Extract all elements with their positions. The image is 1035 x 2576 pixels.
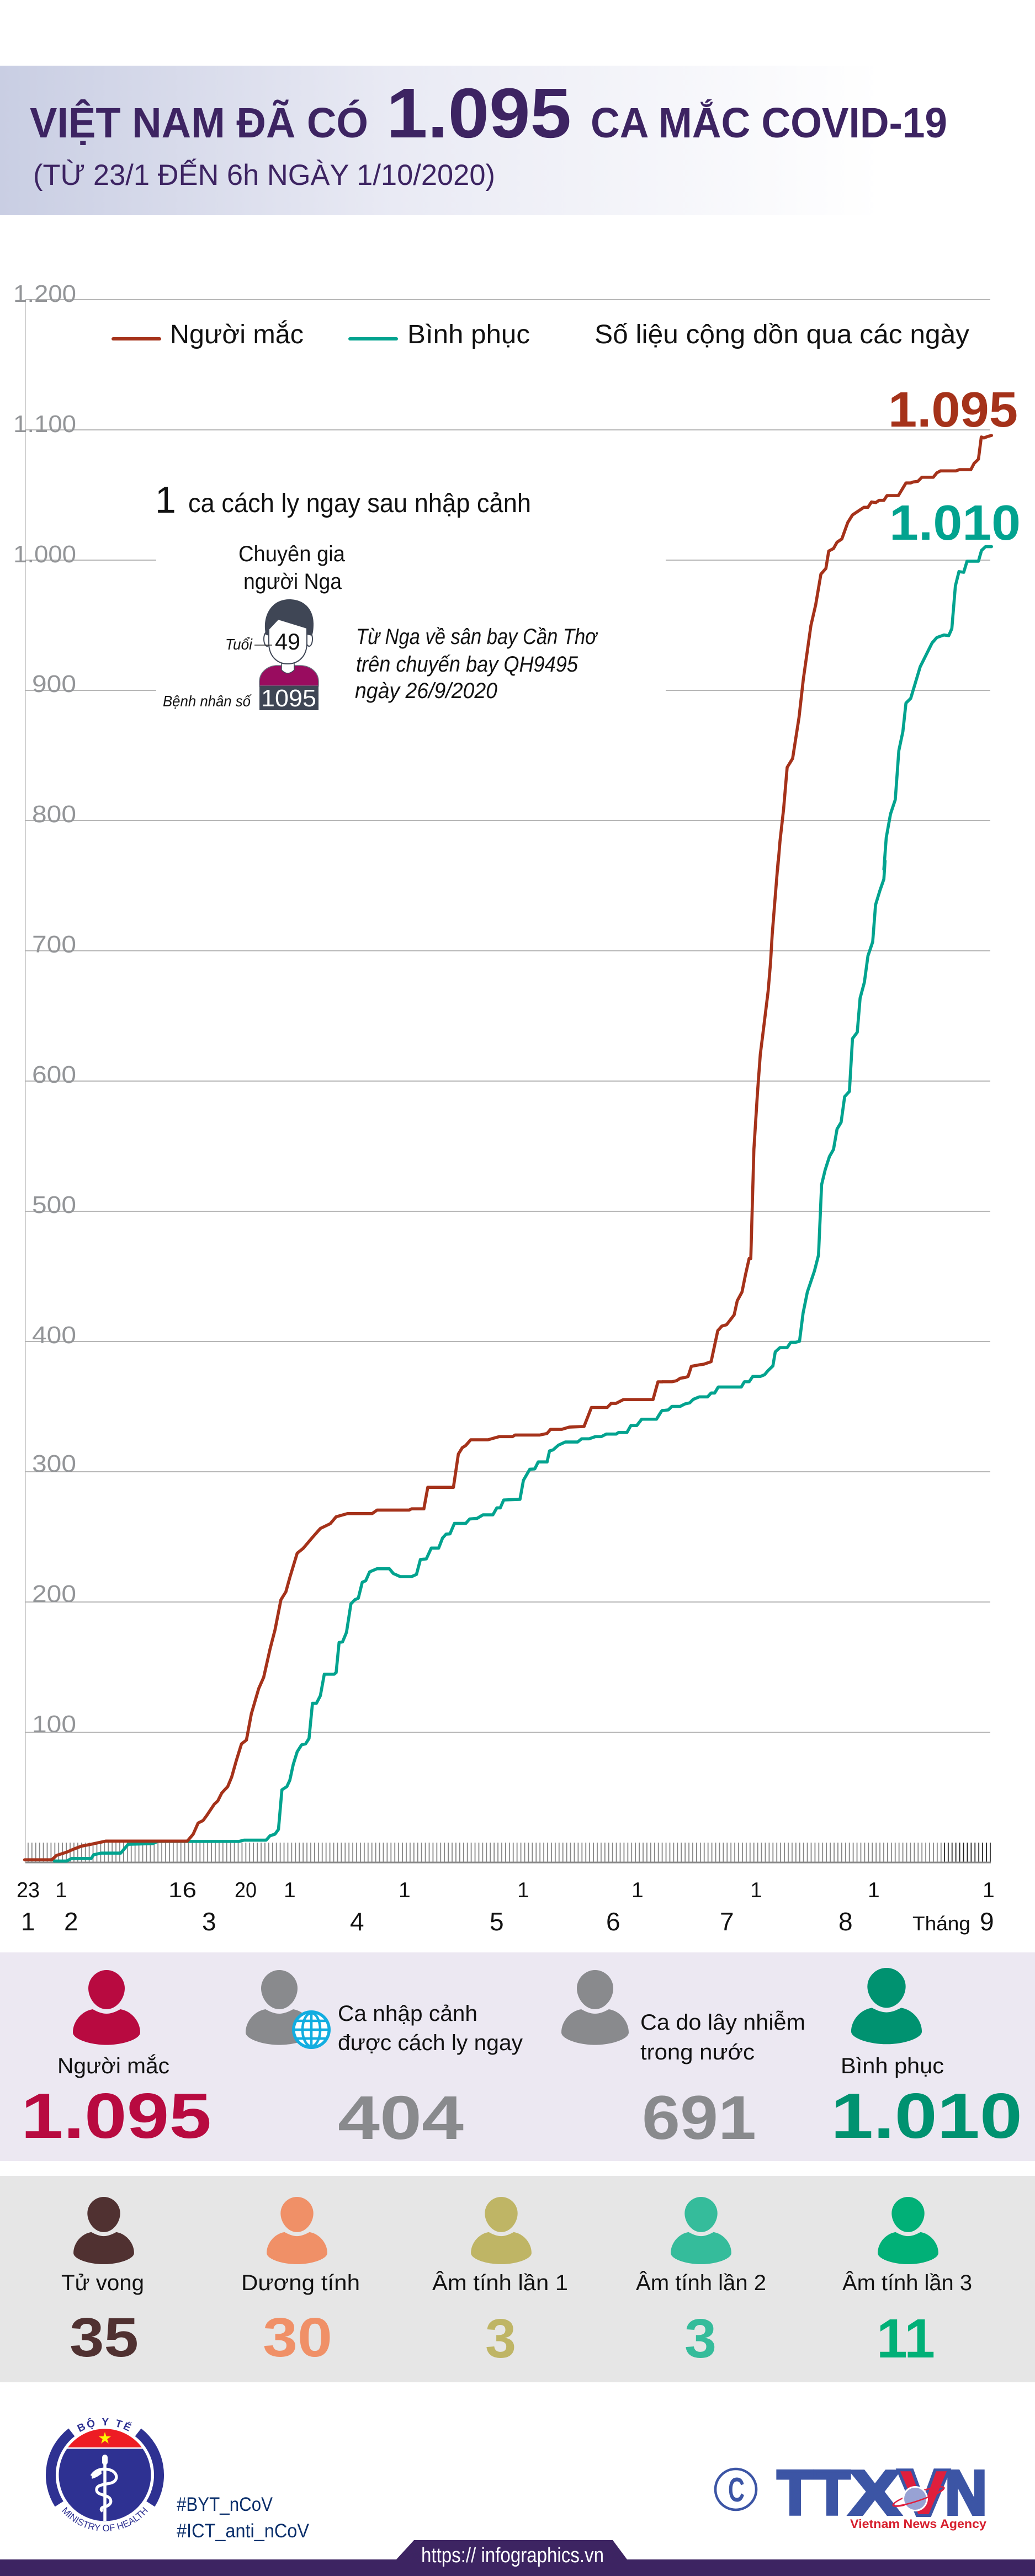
stat: positive: 30 (263, 2307, 332, 2369)
stat: domestic: Ca do lây nhiễm (640, 2010, 805, 2035)
stat: deaths: 35 (70, 2307, 139, 2369)
x axis month labels: 9 (980, 1907, 994, 1936)
x axis month labels: 5 (490, 1907, 504, 1936)
agency wordmark: V (900, 2458, 947, 2527)
y axis labels: 1.000 (13, 541, 76, 568)
y axis labels: 200 (32, 1580, 76, 1608)
stat: imported: Ca nhập cảnh (338, 2002, 477, 2026)
x axis month labels: 8 (838, 1907, 853, 1936)
agency wordmark: T (814, 2458, 850, 2527)
x axis month labels: 2 (64, 1907, 78, 1936)
x axis date labels: 20 (235, 1878, 257, 1902)
stat: positive (241, 2197, 360, 2369)
y axis labels: 300 (32, 1450, 76, 1477)
icon: patient figure (259, 599, 319, 712)
x axis month labels: 1 (21, 1907, 35, 1936)
stat: deaths: Tử vong (61, 2271, 144, 2295)
y axis labels: 100 (32, 1711, 76, 1738)
flight note: trên chuyến bay QH9495 (356, 652, 578, 677)
x axis month labels: 6 (606, 1907, 620, 1936)
agency wordmark (777, 2458, 987, 2527)
icon: person grey (561, 1970, 629, 2045)
hashtags: #ICT_anti_nCoV (177, 2520, 310, 2542)
title: 1.095 (386, 74, 571, 153)
x axis date labels: 23 (17, 1878, 40, 1902)
hashtags: #BYT_nCoV (177, 2494, 273, 2515)
stat: imported: 404 (338, 2083, 464, 2152)
patient description: Chuyên gia (238, 542, 346, 566)
stat: imported (246, 1970, 523, 2152)
y axis labels: 1.200 (13, 280, 76, 307)
x axis date labels: 1 (631, 1878, 644, 1902)
annotation heading (155, 479, 531, 521)
x axis date labels: 1 (517, 1878, 529, 1902)
x axis date labels: 1 (55, 1878, 67, 1902)
header band (0, 66, 1035, 215)
flight note (355, 625, 598, 703)
line chart: cumulative cases (13, 280, 1021, 1936)
icon: person green (851, 1968, 922, 2044)
icon: person olive (471, 2197, 532, 2264)
logo: Ministry of Health: MINISTRY OF HEALTH (62, 2507, 148, 2532)
y axis labels: 400 (32, 1322, 76, 1349)
stat: domestic: trong nước (640, 2040, 755, 2064)
agency wordmark: T (777, 2458, 813, 2527)
legend: Số liệu cộng dồn qua các ngày (595, 320, 969, 349)
logo: TTXVN (715, 2458, 987, 2531)
agency wordmark: N (945, 2458, 987, 2527)
stat: negative twice: 3 (684, 2308, 716, 2370)
stat: domestic: 691 (642, 2083, 756, 2152)
flight note: ngày 26/9/2020 (355, 679, 497, 703)
icon: person teal (671, 2197, 731, 2264)
y axis labels: 500 (32, 1191, 76, 1218)
patient number: 1095 (261, 685, 316, 712)
agency wordmark: X (850, 2458, 900, 2527)
end value label: recovered: 1.010 (889, 496, 1021, 551)
icon: person orange (267, 2197, 327, 2264)
x axis month labels: Tháng (912, 1912, 970, 1935)
title (30, 74, 947, 153)
legend: Người mắc (170, 320, 304, 349)
annotation heading: ca cách ly ngay sau nhập cảnh (188, 489, 531, 518)
line: confirmed cases (red) (25, 435, 991, 1860)
x axis date labels: 1 (284, 1878, 296, 1902)
flight note: Từ Nga về sân bay Cần Thơ (356, 625, 598, 649)
x axis date labels: 16 (168, 1878, 197, 1902)
agency name: Vietnam News Agency (850, 2517, 987, 2531)
x axis date labels: 1 (868, 1878, 880, 1902)
icon: person brown (73, 2197, 134, 2264)
stat: recovered (831, 1968, 1022, 2152)
y axis labels: 600 (32, 1061, 76, 1088)
patient description: người Nga (243, 570, 342, 594)
x axis day ticks (25, 1853, 991, 1862)
patient description (238, 542, 346, 594)
icon: person green (878, 2197, 938, 2264)
logo: Ministry of Health: BỘ Y TẾ (77, 2418, 132, 2432)
stat: negative three times (842, 2197, 972, 2370)
age label (225, 636, 272, 653)
y axis labels: 700 (32, 931, 76, 958)
stat: recovered: Bình phục (841, 2054, 944, 2078)
legend (113, 320, 969, 349)
stat: confirmed (21, 1970, 211, 2152)
patient age: 49 (275, 629, 300, 654)
y axis labels: 1.100 (13, 411, 76, 438)
icon: person red (73, 1970, 140, 2045)
panel: status breakdown (0, 2176, 1035, 2382)
chart grid and y axis (25, 300, 990, 1862)
stat: negative three times: 11 (877, 2308, 935, 2370)
x axis month labels: 3 (202, 1907, 216, 1936)
patient number label: Bệnh nhân số (163, 693, 252, 710)
line: recovered (teal) (54, 547, 991, 1861)
hashtags (177, 2494, 310, 2542)
stat: negative once (432, 2197, 568, 2370)
age label: Tuổi (225, 636, 253, 653)
stat: negative three times: Âm tính lần 3 (842, 2270, 972, 2295)
website url: https:// infographics.vn (421, 2544, 604, 2567)
x axis month labels: 4 (350, 1907, 364, 1936)
subtitle: (TỪ 23/1 ĐẾN 6h NGÀY 1/10/2020) (33, 158, 495, 191)
x axis date labels: 1 (399, 1878, 411, 1902)
stat: negative twice: Âm tính lần 2 (636, 2270, 766, 2295)
stat: confirmed: 1.095 (21, 2080, 211, 2152)
y axis labels: 900 (32, 670, 76, 698)
stat: recovered: 1.010 (831, 2080, 1022, 2152)
title: VIỆT NAM ĐÃ CÓ (30, 99, 368, 147)
legend: Bình phục (407, 320, 530, 349)
stat: negative once: 3 (485, 2308, 516, 2370)
x axis date labels (17, 1878, 995, 1902)
panel: main totals (0, 1952, 1035, 2161)
stat: deaths (61, 2197, 144, 2369)
y axis labels (13, 280, 76, 1738)
copyright mark (715, 2469, 756, 2510)
icon: person grey with globe (246, 1970, 331, 2049)
end value label: cases: 1.095 (888, 382, 1018, 438)
y axis labels: 800 (32, 801, 76, 828)
annotation: imported case (155, 479, 598, 712)
annotation heading: 1 (155, 479, 176, 521)
stat: confirmed: Người mắc (57, 2053, 169, 2078)
title: CA MẮC COVID-19 (591, 99, 947, 147)
x axis month labels (21, 1907, 994, 1936)
stat: positive: Dương tính (241, 2271, 360, 2295)
x axis date labels: 1 (750, 1878, 762, 1902)
x axis month labels: 7 (720, 1907, 734, 1936)
footer bar (0, 2540, 1035, 2576)
stat: negative twice (636, 2197, 766, 2370)
x axis date labels: 1 (983, 1878, 995, 1902)
stat: domestic (561, 1970, 805, 2152)
copyright mark: C (728, 2471, 745, 2509)
stat: negative once: Âm tính lần 1 (432, 2270, 568, 2295)
logo: Ministry of Health (45, 2418, 164, 2532)
stat: imported: được cách ly ngay (338, 2031, 523, 2055)
